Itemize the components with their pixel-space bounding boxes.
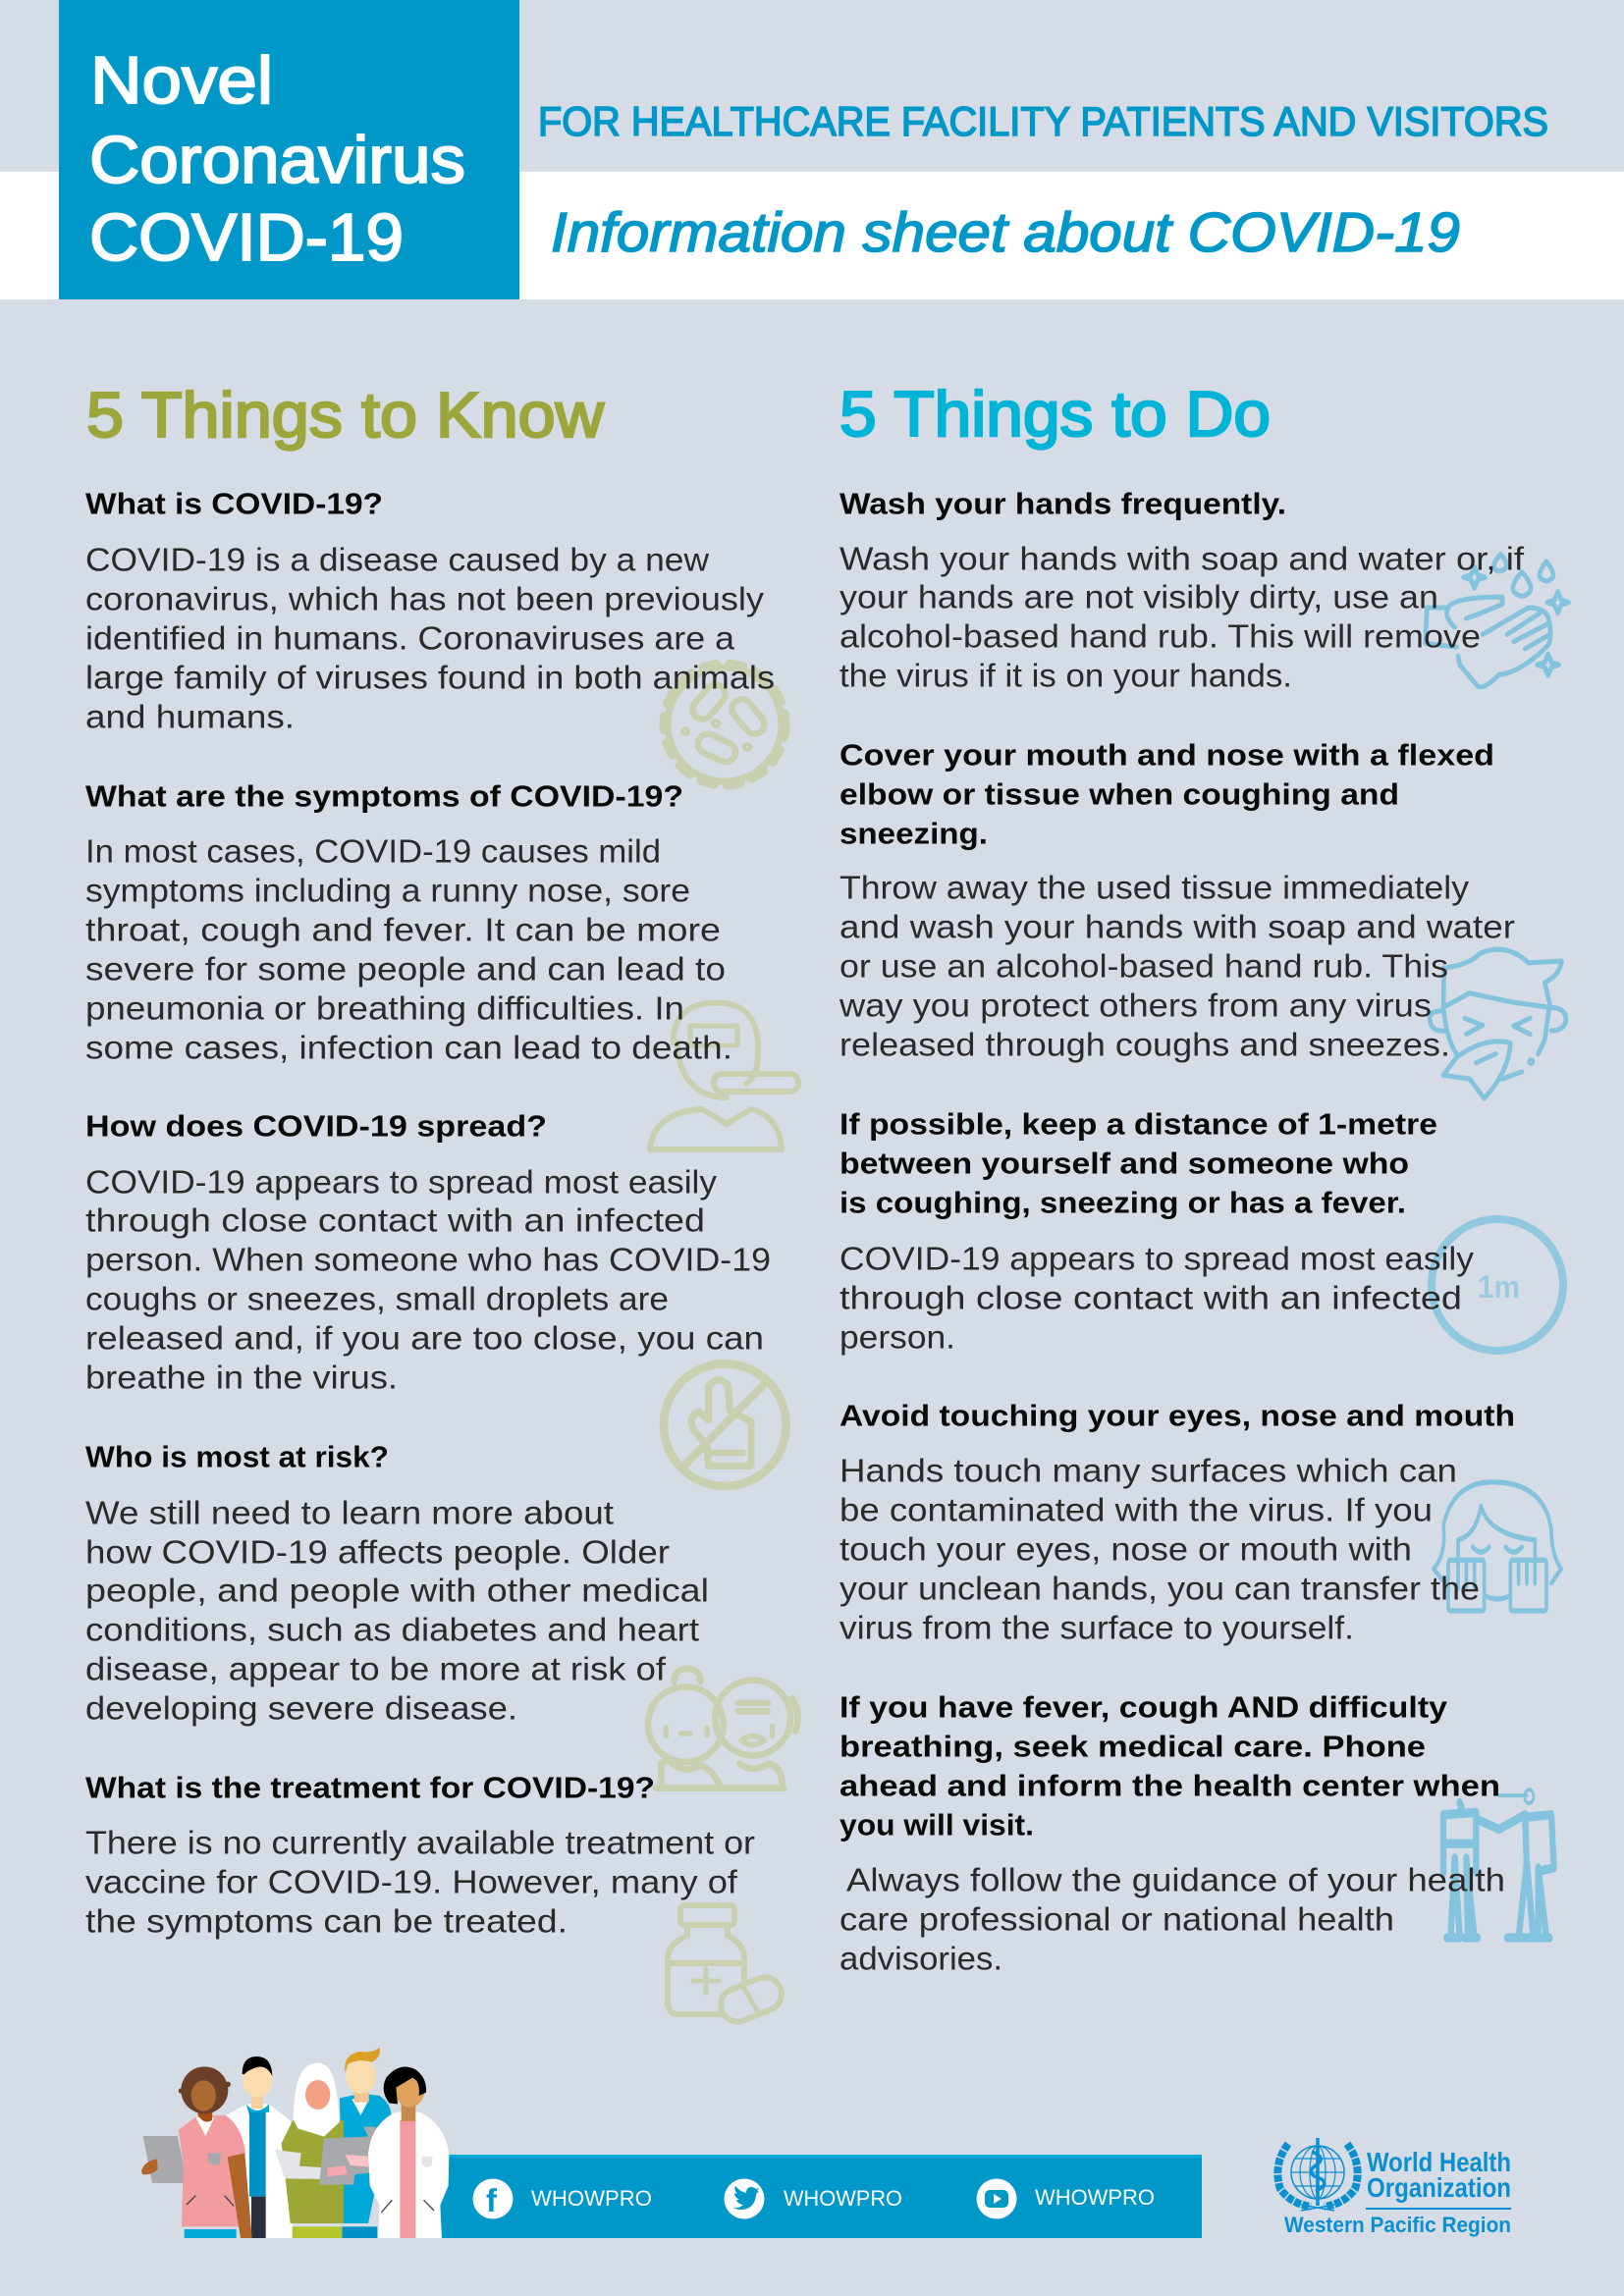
header white band	[0, 172, 1624, 299]
section: what is COVID-19	[85, 487, 775, 734]
icon: washing hands	[1426, 555, 1569, 687]
section: symptoms: severe for some people and can lead to	[85, 950, 726, 988]
section: seek medical care: breathing, seek medical care. Phone	[839, 1730, 1426, 1763]
woman in hijab	[275, 2063, 376, 2238]
section: how it spreads: breathe in the virus.	[85, 1359, 398, 1396]
icon: one metre circle: 1m	[1478, 1269, 1520, 1305]
icon: one metre circle	[1432, 1219, 1563, 1351]
section: how it spreads: coughs or sneezes, small droplets are	[85, 1280, 669, 1317]
section: avoid touching face: touch your eyes, nose or mouth with	[839, 1531, 1412, 1567]
section: cover mouth and nose: Throw away the used tissue immediately	[839, 870, 1470, 905]
icon: twitter	[725, 2179, 764, 2218]
section: seek medical care: If you have fever, cough AND difficulty	[839, 1690, 1448, 1724]
section: wash hands: Wash your hands frequently.	[839, 487, 1286, 520]
section: treatment	[85, 1771, 755, 1940]
section: cover mouth and nose	[839, 738, 1515, 1062]
audience subtitle: FOR HEALTHCARE FACILITY PATIENTS AND VISITORS	[538, 98, 1548, 144]
section: wash hands: the virus if it is on your hands.	[839, 658, 1292, 693]
section: who is at risk	[85, 1439, 709, 1726]
section: what is COVID-19: COVID-19 is a disease caused by a new	[85, 542, 709, 577]
section: seek medical care: care professional or national health	[839, 1900, 1394, 1938]
icon: facebook	[473, 2179, 513, 2218]
section: wash hands: your hands are not visibly dirty, use an	[839, 579, 1438, 614]
section: seek medical care: Always follow the guidance of your health	[846, 1861, 1505, 1898]
WHO logo: Organization	[1367, 2172, 1511, 2203]
section: what is COVID-19: coronavirus, which has not been previously	[85, 581, 765, 616]
section: cover mouth and nose: Cover your mouth and nose with a flexed	[839, 738, 1494, 772]
section: what is COVID-19: and humans.	[85, 699, 295, 734]
section: cover mouth and nose: elbow or tissue when coughing and	[839, 777, 1399, 811]
woman in pink scrubs	[141, 2066, 252, 2238]
icon: medicine bottle and capsule	[668, 1905, 786, 2027]
section: keep distance: person.	[839, 1319, 955, 1355]
section: symptoms: What are the symptoms of COVID-19?	[85, 779, 683, 813]
section: wash hands	[839, 487, 1525, 693]
section: symptoms: In most cases, COVID-19 causes mild	[85, 832, 661, 870]
header title block	[59, 0, 519, 299]
section: how it spreads: person. When someone who has COVID-19	[85, 1241, 771, 1278]
section: cover mouth and nose: sneezing.	[839, 817, 988, 850]
section: who is at risk: developing severe disease.	[85, 1690, 517, 1726]
section: cover mouth and nose: and wash your hands with soap and water	[839, 909, 1515, 944]
section: seek medical care: advisories.	[839, 1940, 1002, 1977]
section: seek medical care: you will visit.	[839, 1808, 1034, 1842]
column heading: 5 Things to Know: 5 Things to Know	[86, 379, 605, 451]
man in blue scrubs	[340, 2048, 391, 2238]
section: symptoms: some cases, infection can lead to death.	[85, 1029, 732, 1066]
icon: person with thermometer	[650, 1003, 798, 1149]
section: keep distance: COVID-19 appears to spread most easily	[839, 1241, 1475, 1276]
youtube handle: WHOWPRO	[1035, 2185, 1155, 2210]
section: symptoms: symptoms including a runny nose, sore	[85, 872, 690, 909]
WHO emblem	[1277, 2138, 1358, 2211]
section: keep distance: through close contact with an infected	[839, 1280, 1462, 1315]
illustration: healthcare workers	[141, 2048, 449, 2238]
section: symptoms: throat, cough and fever. It can be more	[85, 911, 721, 948]
section: avoid touching face: be contaminated with the virus. If you	[839, 1492, 1433, 1527]
section: who is at risk: how COVID-19 affects people. Older	[85, 1533, 670, 1571]
section: what is COVID-19: What is COVID-19?	[85, 487, 383, 520]
section: who is at risk: Who is most at risk?	[85, 1439, 389, 1474]
header title block: COVID-19	[89, 200, 404, 275]
section: who is at risk: We still need to learn more about	[85, 1494, 614, 1531]
section: who is at risk: people, and people with other medical	[85, 1573, 709, 1608]
icon: facebook: f	[486, 2182, 498, 2218]
section: what is COVID-19: identified in humans. Coronaviruses are a	[85, 620, 735, 656]
information sheet title: Information sheet about COVID-19	[551, 201, 1460, 264]
icon: youtube	[976, 2179, 1017, 2218]
WHO logo: World Health	[1367, 2147, 1511, 2177]
section: how it spreads: through close contact with an infected	[85, 1201, 705, 1239]
social media bar	[432, 2155, 1202, 2238]
section: who is at risk: conditions, such as diabetes and heart	[85, 1612, 699, 1647]
section: seek medical care	[839, 1690, 1505, 1977]
section: treatment: What is the treatment for COVID-19?	[85, 1771, 655, 1804]
section: keep distance	[839, 1107, 1475, 1355]
section: avoid touching face: your unclean hands, you can transfer the	[839, 1571, 1480, 1606]
section: who is at risk: disease, appear to be more at risk of	[85, 1651, 667, 1686]
WHO logo	[1277, 2138, 1511, 2237]
section: cover mouth and nose: way you protect others from any virus	[839, 988, 1432, 1023]
section: keep distance: between yourself and someone who	[839, 1147, 1409, 1180]
section: avoid touching face	[839, 1398, 1515, 1645]
column heading: 5 Things to Do: 5 Things to Do	[839, 378, 1271, 450]
icon: doctor and patient	[1443, 1789, 1554, 1938]
section: how it spreads: released and, if you are too close, you can	[85, 1319, 764, 1357]
section: what is COVID-19: large family of viruses found in both animals	[85, 660, 775, 695]
WHO logo: Western Pacific Region	[1284, 2213, 1511, 2237]
section: wash hands: alcohol-based hand rub. This will remove	[839, 618, 1481, 654]
header title block: Coronavirus	[89, 123, 465, 197]
section: avoid touching face: Avoid touching your eyes, nose and mouth	[839, 1398, 1515, 1433]
section: symptoms: pneumonia or breathing difficulties. In	[85, 989, 684, 1027]
section: seek medical care: ahead and inform the health center when	[839, 1769, 1500, 1802]
icon: virus	[664, 664, 785, 785]
section: keep distance: is coughing, sneezing or has a fever.	[839, 1186, 1406, 1219]
icon: sneezing face	[1430, 949, 1566, 1098]
section: treatment: vaccine for COVID-19. However, many of	[85, 1863, 738, 1900]
woman in white coat (front)	[368, 2067, 449, 2238]
section: wash hands: Wash your hands with soap and water or, if	[839, 540, 1525, 577]
section: symptoms	[85, 779, 732, 1066]
header title block: Novel	[90, 43, 273, 118]
twitter handle: WHOWPRO	[784, 2186, 902, 2211]
section: avoid touching face: Hands touch many surfaces which can	[839, 1453, 1457, 1488]
section: how it spreads: How does COVID-19 spread?	[85, 1109, 547, 1143]
section: cover mouth and nose: released through coughs and sneezes.	[839, 1027, 1450, 1062]
section: treatment: There is no currently available treatment or	[85, 1824, 755, 1861]
man in white coat (back)	[226, 2056, 293, 2238]
section: treatment: the symptoms can be treated.	[85, 1902, 568, 1940]
section: how it spreads: COVID-19 appears to spread most easily	[85, 1164, 718, 1200]
icon: face with hands covering	[1434, 1482, 1561, 1611]
facebook handle: WHOWPRO	[531, 2186, 652, 2211]
section: how it spreads	[85, 1109, 771, 1396]
section: cover mouth and nose: or use an alcohol-based hand rub. This	[839, 948, 1448, 984]
section: keep distance: If possible, keep a distance of 1-metre	[839, 1107, 1437, 1141]
icon: elderly couple	[648, 1669, 798, 1789]
icon: no touching hand	[664, 1363, 786, 1486]
section: avoid touching face: virus from the surface to yourself.	[839, 1610, 1354, 1645]
